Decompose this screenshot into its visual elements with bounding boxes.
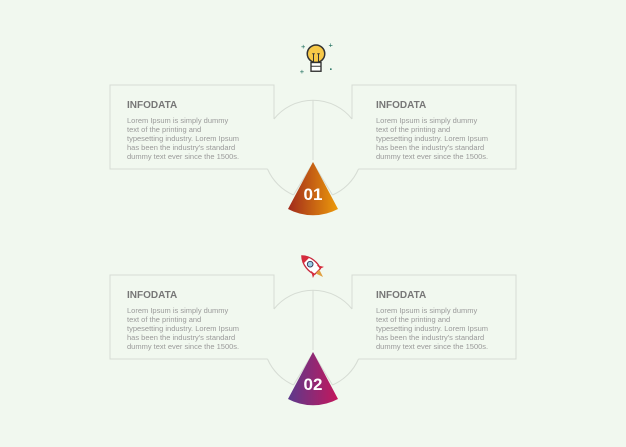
text block: left: text of the printing and: [127, 315, 201, 324]
text block: right: typesetting industry. Lorem Ipsum: [376, 134, 488, 143]
icon: rocket: [296, 250, 329, 283]
text block: left: typesetting industry. Lorem Ipsum: [127, 134, 239, 143]
text block: right: Lorem Ipsum is simply dummy: [376, 116, 478, 125]
number cone 01: [288, 162, 338, 215]
text block: right: text of the printing and: [376, 125, 450, 134]
text block: left: INFODATA: [127, 100, 177, 111]
icon: light bulb: +: [300, 67, 305, 76]
icon: light bulb: +: [301, 42, 306, 51]
text block: right: dummy text ever since the 1500s.: [376, 152, 488, 161]
text block: left: has been the industry's standard: [127, 143, 235, 152]
circle arcs: [268, 290, 358, 385]
panel: right box outline: [352, 275, 516, 359]
text block: left: text of the printing and: [127, 125, 201, 134]
number cone 02: [288, 352, 338, 405]
text block: right: text of the printing and: [376, 315, 450, 324]
text block: left: [127, 100, 239, 161]
text block: right: typesetting industry. Lorem Ipsum: [376, 324, 488, 333]
text block: left: dummy text ever since the 1500s.: [127, 342, 239, 351]
number cone 01: 01: [304, 185, 322, 204]
text block: right: INFODATA: [376, 290, 426, 301]
text block: left: typesetting industry. Lorem Ipsum: [127, 324, 239, 333]
text block: left: INFODATA: [127, 290, 177, 301]
text block: right: [376, 290, 488, 351]
text block: right: has been the industry's standard: [376, 143, 484, 152]
text block: right: Lorem Ipsum is simply dummy: [376, 306, 478, 315]
number cone 02: 02: [304, 375, 322, 394]
icon: light bulb: [300, 40, 334, 76]
text block: right: INFODATA: [376, 100, 426, 111]
icon: light bulb: •: [330, 66, 332, 73]
text block: right: has been the industry's standard: [376, 333, 484, 342]
icon: light bulb: +: [328, 41, 334, 50]
block 2: [110, 275, 516, 405]
text block: right: dummy text ever since the 1500s.: [376, 342, 488, 351]
block 1: [110, 85, 516, 215]
text block: right: [376, 100, 488, 161]
text block: left: dummy text ever since the 1500s.: [127, 152, 239, 161]
circle arcs: [268, 100, 358, 195]
text block: left: [127, 290, 239, 351]
panel: right box outline: [352, 85, 516, 169]
text block: left: Lorem Ipsum is simply dummy: [127, 306, 229, 315]
text block: left: Lorem Ipsum is simply dummy: [127, 116, 229, 125]
panel: left box outline: [110, 275, 274, 359]
panel: left box outline: [110, 85, 274, 169]
text block: left: has been the industry's standard: [127, 333, 235, 342]
